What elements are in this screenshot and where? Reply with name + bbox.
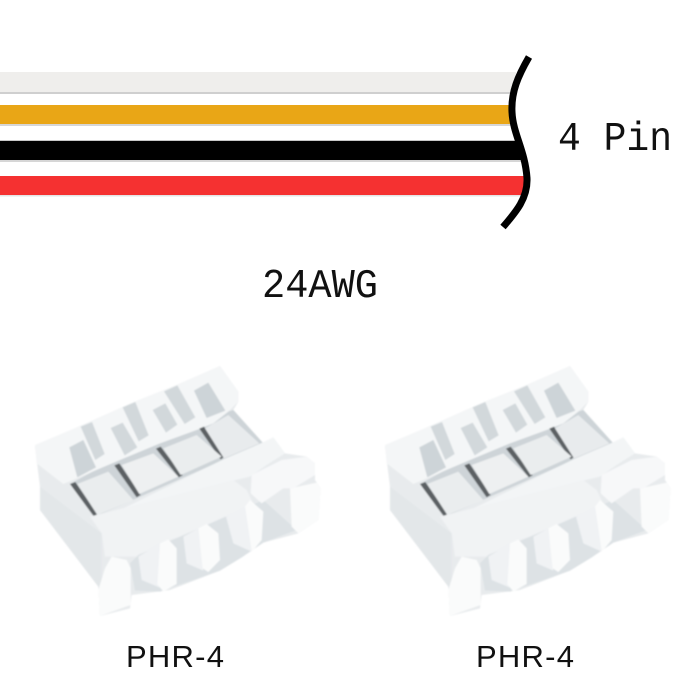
wire: red [0,176,524,196]
wire: white [0,72,516,94]
label: right PHR-4: PHR-4 [476,639,574,674]
label: 4 Pin: 4 Pin [558,117,672,163]
wire: black [0,140,522,162]
brace [503,57,529,227]
label: left PHR-4: PHR-4 [126,639,224,674]
label: 24AWG: 24AWG [262,264,378,310]
wire: orange [0,105,514,126]
connector: left PHR-4 [35,366,321,616]
connector: right PHR-4 [385,366,671,616]
wire bundle [0,72,524,196]
